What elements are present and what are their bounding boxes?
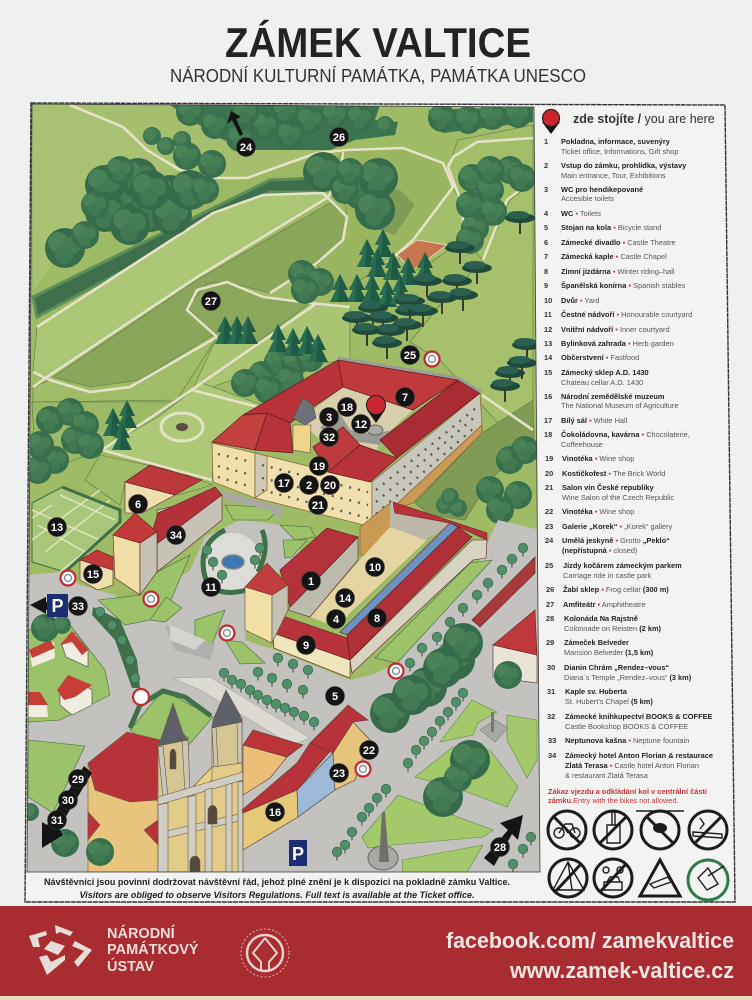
item 32: 32 [547, 712, 555, 721]
map number badges: 10 [369, 562, 381, 574]
arrow: route to 29 30 31 [42, 766, 92, 848]
map number badges: 32 [323, 432, 335, 444]
map number badges: 31 [51, 815, 63, 827]
item 3: Accesible toilets [561, 194, 614, 203]
item 34: Zámecký hotel Anton Florian & restaurace [565, 751, 713, 760]
item 7: Zámecká kaple ▪ Castle Chapel [561, 252, 667, 261]
item 29 [546, 638, 654, 657]
park fields [32, 125, 534, 520]
map number badges: 7 [402, 392, 408, 404]
map number badges: 19 [313, 461, 325, 473]
red prohibition note [548, 787, 707, 805]
item 1: Pokladna, informace, suvenýry [561, 137, 671, 146]
item 8: Zimní jízdárna ▪ Winter riding–hall [561, 267, 675, 276]
icon: dogs on leash [688, 860, 728, 900]
map number badges: 5 [332, 691, 338, 703]
church [88, 690, 243, 872]
item 26: 26 [546, 585, 554, 594]
item 34: & restaurant Zlatá Terasa [565, 771, 649, 780]
logo: UNESCO heritage emblem [241, 929, 289, 977]
item 30: Diana´s Temple „Rendez–vous“ (3 km) [564, 673, 692, 682]
map number badges: 6 [135, 499, 141, 511]
castle terrace [220, 490, 282, 520]
parking sign left with arrow [30, 594, 68, 617]
item 22: 22 [545, 507, 553, 516]
item 21 [545, 483, 674, 502]
item 28: Kolonáda Na Rajstně [564, 614, 638, 623]
item 21: 21 [545, 483, 553, 492]
item 29: Zámeček Belveder [564, 638, 629, 647]
visitor regulations note: Visitors are obliged to observe Visitors Regulations. Full text is available at the Ticket office. [80, 890, 474, 901]
icon: no fire [594, 811, 632, 849]
item 10 [544, 296, 600, 305]
item 4: WC ▪ Toilets [561, 209, 601, 218]
street strip along town [173, 677, 310, 745]
church-side trees [21, 803, 114, 866]
item 3: 3 [544, 185, 548, 194]
panel: illustrated castle map [21, 96, 542, 872]
item 31: Kaple sv. Huberta [565, 687, 628, 696]
map number badges: 12 [355, 419, 367, 431]
item 1 [544, 137, 678, 156]
lower board edge [0, 996, 752, 1000]
item 4 [544, 209, 601, 218]
town east houses and wall [472, 557, 537, 683]
item 1: Ticket office, Informations, Gift shop [561, 147, 678, 156]
item 31 [547, 687, 653, 706]
legend item list [544, 137, 713, 780]
red prohibition note: zámku.Entry with the bikes not allowed. [548, 796, 679, 805]
lower roads and square paving [27, 520, 540, 872]
icon: no motor vehicles [594, 859, 632, 897]
item 3 [544, 185, 643, 203]
map number badges: 30 [62, 795, 74, 807]
map number badges: 4 [333, 614, 340, 626]
item 16 [544, 392, 678, 410]
item 18: 18 [544, 430, 552, 439]
item 3: WC pro hendikepované [561, 185, 643, 194]
item 14: Občerstvení ▪ Fastfood [561, 353, 639, 362]
item 11: 11 [544, 310, 552, 319]
map number badges: 23 [333, 768, 345, 780]
lawn patches around roads [28, 505, 492, 813]
map number badges: 1 [308, 576, 314, 588]
oval flower bed [161, 413, 203, 441]
map ground [29, 104, 537, 680]
theatre and hotel block [80, 465, 222, 595]
map border line [27, 104, 540, 872]
north gallery [390, 502, 487, 540]
website address: www.zamek-valtice.cz [509, 958, 734, 983]
item 25: 25 [545, 561, 553, 570]
item 16: The National Museum of Agriculture [561, 401, 678, 410]
item 18 [544, 430, 690, 449]
item 8: 8 [544, 267, 548, 276]
riding hall [340, 523, 487, 673]
item 19: Vinotéka ▪ Wine shop [562, 454, 634, 463]
map number badges: 17 [278, 478, 290, 490]
item 18: Čokoládovna, kavárna ▪ Chocolaterie, [561, 430, 690, 439]
item 24: (nepřístupná ▪ closed) [562, 546, 637, 555]
item 25 [545, 561, 682, 580]
item 2: Vstup do zámku, prohlídka, výstavy [561, 161, 687, 170]
icon: camera warning [640, 860, 680, 896]
map number badges: 11 [205, 582, 217, 594]
herb garden [32, 487, 120, 572]
item 16: 16 [544, 392, 552, 401]
item 9: 9 [544, 281, 548, 290]
item 15 [544, 368, 649, 387]
item 6: Zámecké divadlo ▪ Castle Theatre [561, 238, 676, 247]
castle facades [212, 393, 482, 535]
item 26: Žabí sklep ▪ Frog cellar (300 m) [563, 585, 669, 594]
item 2: Main entrance, Tour, Exhibitions [561, 171, 666, 180]
logo text: Národní památkový ústav: ÚSTAV [107, 957, 154, 975]
item 31: 31 [547, 687, 555, 696]
item 25: Carriage ride in castle park [563, 571, 652, 580]
forest mass [170, 105, 533, 150]
map number badges: 34 [170, 530, 183, 542]
map number badges: 24 [240, 142, 253, 154]
item 2: 2 [544, 161, 548, 170]
castle red roofs [212, 360, 480, 482]
item 16: Národní zemědělské muzeum [561, 392, 665, 401]
item 28: Colonnade on Reisten (2 km) [564, 624, 662, 633]
item 19: 19 [545, 454, 553, 463]
item 12: Vnitřní nádvoří ▪ Inner courtyard [561, 325, 670, 334]
item 27: 27 [546, 600, 554, 609]
subtitle: NÁRODNÍ KULTURNÍ PAMÁTKA, PAMÁTKA UNESCO [170, 65, 586, 86]
item 17: 17 [544, 416, 552, 425]
map number badges: 3 [326, 412, 332, 424]
item 23: Galerie „Korek“ ▪ „Korek“ gallery [562, 522, 673, 531]
map number badges: 21 [312, 500, 324, 512]
icon: no drones [636, 811, 684, 849]
yard [310, 527, 427, 627]
castle-side lawns [206, 482, 210, 486]
item 29: 29 [546, 638, 554, 647]
parking sign lower: P [292, 844, 304, 864]
map number badges: 29 [72, 774, 84, 786]
item 1: 1 [544, 137, 548, 146]
legend header pin [542, 110, 560, 134]
item 20: 20 [545, 469, 553, 478]
item 21: Salon vín České republiky [562, 483, 654, 492]
legend header: zde stojíte / you are here [573, 112, 715, 126]
item 2 [544, 161, 687, 180]
map number badges: 28 [494, 842, 506, 854]
park paths [33, 105, 533, 480]
map number badges: 9 [303, 640, 309, 652]
item 29: Mansion Belveder (1,5 km) [564, 648, 654, 657]
icon: no camping [549, 859, 587, 897]
visitor regulations note [44, 877, 510, 901]
item 34: 34 [548, 751, 557, 760]
bicycle signs [60, 352, 440, 776]
map number badges: 25 [404, 350, 416, 362]
item 4: 4 [544, 209, 549, 218]
map number badges: 20 [324, 480, 336, 492]
visitor regulations note: Návštěvníci jsou povinni dodržovat návštěvní řád, jehož plné znění je k dispozici na pokladně zámku Valtice. [44, 877, 510, 888]
parking sign lower [289, 840, 307, 866]
item 15: 15 [544, 368, 552, 377]
item 24: Umělá jeskyně ▪ Grotto „Peklo“ [562, 536, 670, 545]
upper meadows [32, 104, 178, 290]
castle window rows [218, 408, 476, 518]
item 9: Španělská konírna ▪ Spanish stables [561, 281, 686, 290]
logo text: Národní památkový ústav: NÁRODNÍ [107, 925, 176, 942]
map number badges: 18 [341, 402, 353, 414]
item 33: 33 [548, 736, 556, 745]
item 20: Kostičkofest ▪ The Brick World [562, 469, 665, 478]
item 32: Zámecké knihkupectví BOOKS & COFFEE [565, 712, 713, 721]
item 22: Vinotéka ▪ Wine shop [562, 507, 634, 516]
no-entry ring [133, 689, 149, 705]
item 10: 10 [544, 296, 552, 305]
hedge arc behind church [130, 691, 211, 728]
item 7: 7 [544, 252, 548, 261]
item 25: Jízdy kočárem zámeckým parkem [563, 561, 682, 570]
tennis court [397, 240, 447, 270]
parking sign left with arrow: P [51, 596, 64, 616]
castle courtyard [306, 388, 412, 450]
item 34: Zlatá Terasa ▪ Castle hotel Anton Florian [565, 761, 699, 770]
map number badges: 22 [363, 745, 375, 757]
map number badges: 15 [87, 569, 99, 581]
item 32 [547, 712, 713, 731]
map number badges: 27 [205, 296, 217, 308]
roadside hedge [92, 607, 140, 688]
arrow: to grotto [227, 111, 243, 136]
item 15: Zámecký sklep A.D. 1430 [561, 368, 649, 377]
item 31: St. Hubert’s Chapel (5 km) [565, 697, 653, 706]
logo: NPU squares [29, 925, 92, 975]
town buildings [242, 705, 370, 850]
long hedge [33, 177, 340, 317]
logo text: Národní památkový ústav: PAMÁTKOVÝ [107, 940, 199, 958]
you are here pin [366, 396, 386, 423]
neptune column [368, 812, 398, 870]
item 34 [548, 751, 713, 780]
item 32: Castle Bookshop BOOKS & COFFEE [565, 722, 688, 731]
facebook address: facebook.com/ zamekvaltice [446, 928, 734, 953]
title: ZÁMEK VALTICE [225, 19, 531, 66]
prohibition icons [548, 811, 728, 900]
legend panel [542, 110, 728, 900]
item 11: Čestné nádvoří ▪ Honourable courtyard [561, 310, 692, 319]
item 33: Neptunova kašna ▪ Neptune fountain [565, 736, 689, 745]
courtyard lower walls [320, 410, 390, 445]
item 5: Stojan na kola ▪ Bicycle stand [561, 223, 661, 232]
map number badges: 8 [374, 613, 380, 625]
item 23: 23 [545, 522, 553, 531]
item 28: 28 [546, 614, 554, 623]
corner tower [245, 563, 288, 643]
item 28 [546, 614, 662, 633]
item 17: Bílý sál ▪ White Hall [561, 416, 628, 425]
map number badges: 2 [306, 480, 312, 492]
map number badges: 13 [51, 522, 63, 534]
item 18: Coffeehouse [561, 440, 603, 449]
roof ridge [338, 358, 481, 392]
item 10: Dvůr ▪ Yard [561, 296, 600, 305]
item 13: Bylinková zahrada ▪ Herb garden [561, 339, 674, 348]
item 27: Amfiteátr ▪ Amphitheatre [563, 600, 646, 609]
map number badges: 14 [339, 593, 352, 605]
chapel tower [293, 398, 316, 453]
item 30 [547, 663, 692, 682]
map number badges [48, 128, 510, 856]
square monument [480, 712, 508, 742]
footer band [0, 906, 752, 1000]
south terrace wall [360, 503, 392, 555]
red prohibition note: Zákaz vjezdu a odkládání kol v centrální části [548, 787, 707, 796]
honorary court steps [165, 625, 215, 660]
panel frame [25, 103, 735, 902]
forest trees [24, 96, 539, 524]
item 5: 5 [544, 223, 548, 232]
tree rows [219, 543, 536, 872]
conifers and umbrella pines [103, 211, 542, 450]
stables wing [273, 615, 350, 678]
arrow: route to 28 [484, 815, 523, 866]
item 30: 30 [547, 663, 555, 672]
item 24: 24 [545, 536, 554, 545]
map number badges: 16 [269, 807, 281, 819]
item 15: Chateau cellar A.D. 1430 [561, 378, 643, 387]
icon: no bicycles [548, 811, 586, 849]
item 21: Wine Salon of the Czech Republic [562, 493, 674, 502]
item 6: 6 [544, 238, 548, 247]
icon: no smoking [689, 811, 727, 849]
square parks [362, 700, 537, 872]
item 30: Dianin Chrám „Rendez–vous“ [564, 663, 669, 672]
item 14: 14 [544, 353, 553, 362]
map number badges: 26 [333, 132, 345, 144]
logo text: Národní památkový ústav [107, 925, 199, 975]
small houses [28, 614, 92, 717]
ticket office wing [280, 528, 358, 617]
map number badges: 33 [72, 601, 84, 613]
item 24 [545, 536, 670, 555]
item 12: 12 [544, 325, 552, 334]
inner courtyard fountain [367, 425, 383, 435]
item 13: 13 [544, 339, 552, 348]
fountain garden [202, 530, 265, 593]
